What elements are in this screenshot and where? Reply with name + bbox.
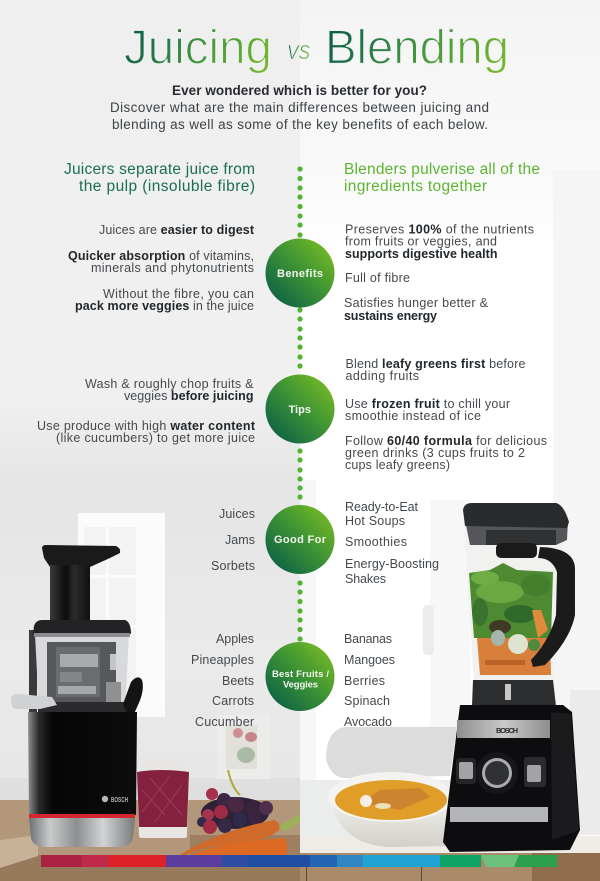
good for: juicing: Sorbets [211,559,255,573]
heading: blenders: ingredients together [344,178,487,195]
tips: blending: Follow 60/40 formula for delicious [345,434,547,448]
blender lid [463,503,569,528]
fruits list: juicing: Pineapples [191,653,254,667]
blender [443,503,580,852]
juicer left spout [11,694,57,709]
good for: blending: Hot Soups [345,514,405,528]
blender cap [496,543,537,558]
heading: blenders [344,161,540,195]
title word: Blending: Blending [325,22,509,74]
picture frame [217,715,270,779]
fruits list: blending: Avocado [344,715,392,729]
juicer shadow back [29,630,37,714]
juicer feed tube [50,565,90,621]
intro text [110,83,489,132]
badge: Best Fruits / Veggies: Veggies [283,680,318,690]
benefits: juicing: pack more veggies in the juice [75,299,254,313]
good for: blending [345,500,439,586]
juicer brand: BOSCH [111,797,128,804]
intro text: blending as well as some of the key benefits of each below. [112,117,488,132]
fruits list: blending: Bananas [344,632,392,646]
carrots [180,814,300,855]
juicer lid rim [34,633,130,637]
blender greens [469,563,553,638]
good for: blending: Ready-to-Eat [345,500,419,514]
badge: Tips: Tips [288,404,311,416]
fruits list: blending: Spinach [344,694,390,708]
tips: juicing: Use produce with high water content [37,419,256,433]
table counter right [300,836,600,881]
benefits: juicing: Without the fibre, you can [103,287,254,301]
juicer right spout [123,677,143,716]
juicer hopper [42,545,120,567]
dotted timeline [297,166,303,642]
intro text: Ever wondered which is better for you? [172,83,427,98]
blender right switch [527,765,541,782]
blender steel band [457,720,550,738]
fruits list: juicing: Apples [216,632,254,646]
good for: juicing: Juices [219,507,255,521]
fruits list: blending: Mangoes [344,653,395,667]
good for: juicing [211,507,255,573]
blender jar top dark section [465,520,568,545]
good for: blending: Energy-Boosting [345,557,439,571]
tips: juicing: (like cucumbers) to get more juice [56,431,255,445]
badge: Best Fruits / Veggies [266,642,334,711]
tips: juicing: Wash & roughly chop fruits & [85,377,254,391]
juicer lid [33,620,131,634]
good for: blending: Smoothies [345,535,407,549]
window: left room [78,513,165,717]
blender dial [476,752,518,794]
tips: blending: cups leafy greens) [345,458,450,472]
tips: blending: green drinks (3 cups fruits to 2 [345,446,525,460]
window: right room frames [300,170,600,840]
benefits: blending: Full of fibre [345,271,410,285]
blender left switch [459,762,473,779]
wall shelf strip [0,778,300,802]
heading: blenders: Blenders pulverise all of the [344,161,540,178]
blender base [443,705,580,852]
blender switch panels [456,758,476,784]
badge: Good For: Good For [274,534,327,546]
tips: blending: Use frozen fruit to chill your [345,397,510,411]
background: right room [300,0,600,881]
benefits: juicing: Quicker absorption of vitamins, [68,249,254,263]
title word: vs: VS [287,42,311,64]
tips: juicing [37,377,256,445]
heading: juicers: Juicers separate juice from [64,161,255,178]
juicer brand icon [102,796,108,802]
heading: juicers: the pulp (insoluble fibre) [79,178,255,195]
benefits: blending: supports digestive health [345,247,498,261]
grapes [197,770,273,834]
juicer red band [29,814,135,818]
benefits: blending: sustains energy [344,309,437,323]
title word: Juicing: Juicing [124,22,272,74]
benefits: blending: from fruits or veggies, and [345,234,497,248]
blender carrots and vegetables [477,610,551,675]
background: left room [0,0,300,881]
benefits: blending: Satisfies hunger better & [344,296,489,310]
badge: Benefits: Benefits [277,268,323,280]
good for: juicing: Jams [225,533,255,547]
tips: juicing: veggies before juicing [124,389,254,403]
tips: blending: Blend leafy greens first before [346,357,526,371]
benefits: blending: Preserves 100% of the nutrients [345,222,534,236]
fruits list: juicing [191,632,254,729]
blender neck [472,680,556,706]
glass of juice [136,753,190,838]
benefits: juicing [68,223,255,313]
fruits list: juicing: Carrots [212,694,254,708]
blender jar [464,522,566,685]
tips: blending: adding fruits [346,369,419,383]
badge: Tips [266,374,334,444]
blender preset strip [450,807,548,822]
juicer body [28,712,137,815]
title [124,22,509,74]
fruits list: blending: Berries [344,674,385,688]
tips: blending: smoothie instead of ice [345,409,481,423]
good for: blending: Shakes [345,572,386,586]
fruits list: juicing: Cucumber [195,715,254,729]
juicer chamber [35,634,129,712]
heading: juicers [64,161,255,195]
benefits: juicing: minerals and phytonutrients [91,261,254,275]
tips: blending [345,357,547,472]
juicer steel base [29,818,135,847]
blender handle [531,547,575,667]
badge: Best Fruits / Veggies: Best Fruits / [272,669,329,680]
badge: Benefits [266,238,334,308]
chair back [326,727,457,778]
soup bowl [328,772,454,847]
badge: Good For [266,505,334,574]
table top left [0,800,300,881]
intro text: Discover what are the main differences between juicing and [110,100,489,115]
benefits: blending [344,222,534,323]
fruits list: blending [344,632,395,729]
fruits list: juicing: Beets [222,674,254,688]
colour bar [41,855,557,867]
benefits: juicing: Juices are easier to digest [99,223,255,237]
juicer [11,545,143,847]
blender brand: BOSCH [496,726,518,735]
